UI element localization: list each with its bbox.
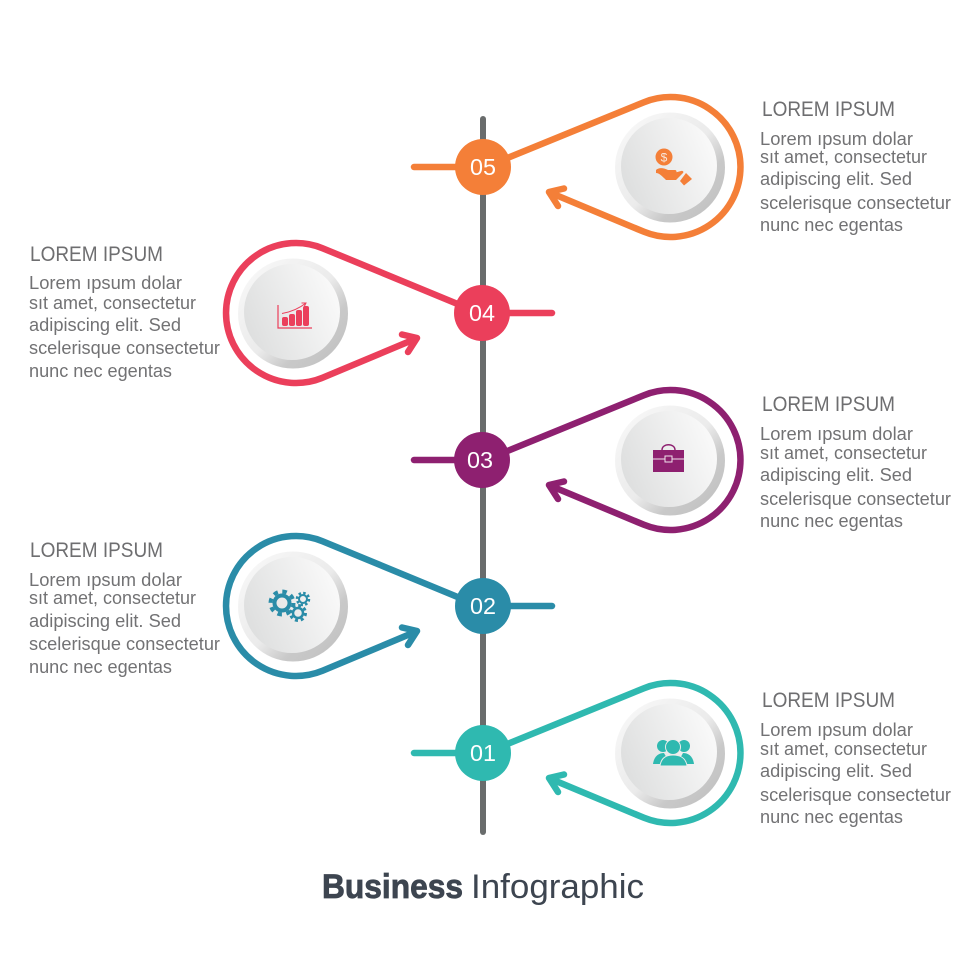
text block 03: Lorem ıpsum dolar [760, 424, 913, 444]
connector tick 04 [495, 310, 552, 316]
connector tick 03 [414, 457, 470, 463]
title: Infographic [471, 868, 644, 906]
text block 02: scelerisque consectetur [29, 634, 220, 654]
icon disc 05 [615, 112, 725, 222]
text block 02: nunc nec egentas [29, 657, 172, 677]
icon: hand holding coin [656, 148, 692, 186]
text block 01: nunc nec egentas [760, 807, 903, 827]
number badge 02: 02 [470, 593, 496, 619]
text block 04: scelerisque consectetur [29, 338, 220, 358]
text block 02: LOREM IPSUM [30, 539, 163, 562]
looped arrow 04 [226, 243, 460, 383]
connector tick 05 [414, 164, 470, 170]
text block 05: sıt amet, consectetur [760, 147, 927, 167]
looped arrow 01 [505, 683, 740, 823]
text block 04: sıt amet, consectetur [29, 293, 196, 313]
icon: briefcase [653, 445, 684, 472]
text block 03: scelerisque consectetur [760, 489, 951, 509]
text block 05: nunc nec egentas [760, 215, 903, 235]
number badge 05: 05 [470, 154, 496, 180]
text block 05: LOREM IPSUM [762, 98, 895, 121]
text block 01 [760, 689, 951, 827]
text block 02: sıt amet, consectetur [29, 588, 196, 608]
text block 03: nunc nec egentas [760, 511, 903, 531]
text block 01: Lorem ıpsum dolar [760, 720, 913, 740]
icon: hand holding coin: $ [661, 150, 668, 164]
text block 01: adipiscing elit. Sed [760, 761, 912, 781]
text block 04: Lorem ıpsum dolar [29, 273, 182, 293]
icon: team of people [653, 740, 694, 766]
text block 05: scelerisque consectetur [760, 193, 951, 213]
text block 02 [29, 539, 220, 677]
number badge 04 [454, 285, 510, 341]
text block 03 [760, 393, 951, 531]
connector tick 02 [495, 603, 552, 609]
step 03: purple [414, 390, 951, 531]
connector tick 01 [414, 750, 470, 756]
text block 05: adipiscing elit. Sed [760, 169, 912, 189]
text block 03: LOREM IPSUM [762, 393, 895, 416]
number badge 02 [455, 578, 511, 634]
title [322, 868, 644, 906]
text block 04: LOREM IPSUM [30, 243, 163, 266]
icon: growth chart [278, 303, 312, 328]
text block 04: nunc nec egentas [29, 361, 172, 381]
icon disc 04 [238, 258, 348, 368]
icon disc 02 [238, 552, 348, 662]
number badge 05 [455, 139, 511, 195]
text block 01: LOREM IPSUM [762, 689, 895, 712]
number badge 04: 04 [469, 300, 495, 326]
icon: gears [270, 592, 309, 620]
looped arrow 02 [226, 536, 460, 676]
number badge 01: 01 [470, 740, 496, 766]
text block 04 [29, 243, 220, 381]
text block 02: adipiscing elit. Sed [29, 611, 181, 631]
step 04: red [29, 243, 552, 383]
number badge 01 [455, 725, 511, 781]
number badge 03 [454, 432, 510, 488]
text block 04: adipiscing elit. Sed [29, 315, 181, 335]
title: Business [322, 868, 463, 906]
text block 02: Lorem ıpsum dolar [29, 570, 182, 590]
step 05: orange [414, 97, 951, 237]
number badge 03: 03 [467, 447, 493, 473]
text block 05: Lorem ıpsum dolar [760, 129, 913, 149]
text block 01: scelerisque consectetur [760, 785, 951, 805]
timeline axis [480, 119, 486, 832]
step 02: blue [29, 536, 552, 677]
looped arrow 03 [505, 390, 740, 530]
text block 03: sıt amet, consectetur [760, 443, 927, 463]
step 01: teal [414, 683, 951, 827]
text block 05 [760, 98, 951, 235]
text block 03: adipiscing elit. Sed [760, 465, 912, 485]
looped arrow 05 [505, 97, 740, 237]
icon disc 03 [615, 406, 725, 516]
icon disc 01 [615, 698, 725, 808]
text block 01: sıt amet, consectetur [760, 739, 927, 759]
